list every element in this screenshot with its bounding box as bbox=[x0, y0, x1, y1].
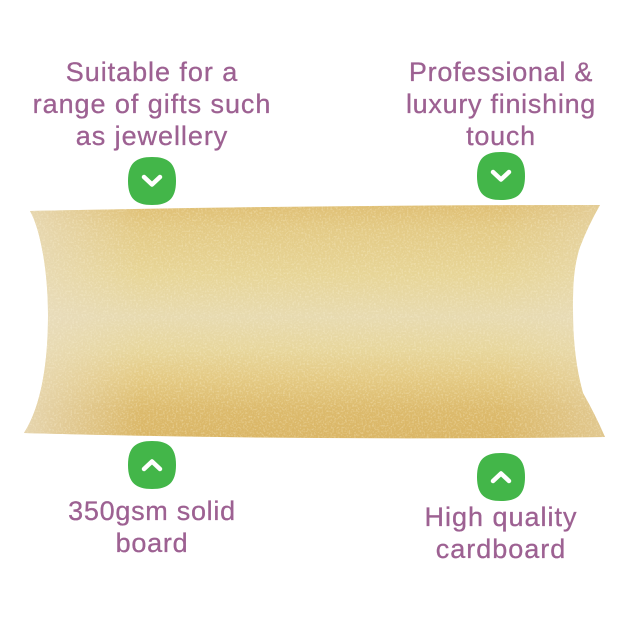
text: suitable for gifts: range of gifts such bbox=[33, 89, 271, 119]
text: board weight: 350gsm solid bbox=[68, 496, 236, 526]
text: cardboard quality: cardboard bbox=[436, 534, 566, 564]
icon: down chevron top right bbox=[477, 152, 525, 200]
text: professional finish: touch bbox=[466, 121, 536, 151]
text: board weight: board bbox=[116, 528, 188, 558]
text: cardboard quality: High quality bbox=[424, 502, 578, 532]
text: professional finish: luxury finishing bbox=[406, 89, 596, 119]
text: suitable for gifts: as jewellery bbox=[76, 121, 228, 151]
text: professional finish bbox=[406, 57, 596, 151]
icon: up chevron bottom left bbox=[128, 441, 176, 489]
icon: down chevron top left bbox=[128, 157, 176, 205]
icon: up chevron bottom right bbox=[477, 453, 525, 501]
text: professional finish: Professional & bbox=[409, 57, 593, 87]
text: suitable for gifts: Suitable for a bbox=[66, 57, 238, 87]
text: board weight bbox=[68, 496, 236, 558]
text: suitable for gifts bbox=[33, 57, 271, 151]
text: cardboard quality bbox=[424, 502, 578, 564]
